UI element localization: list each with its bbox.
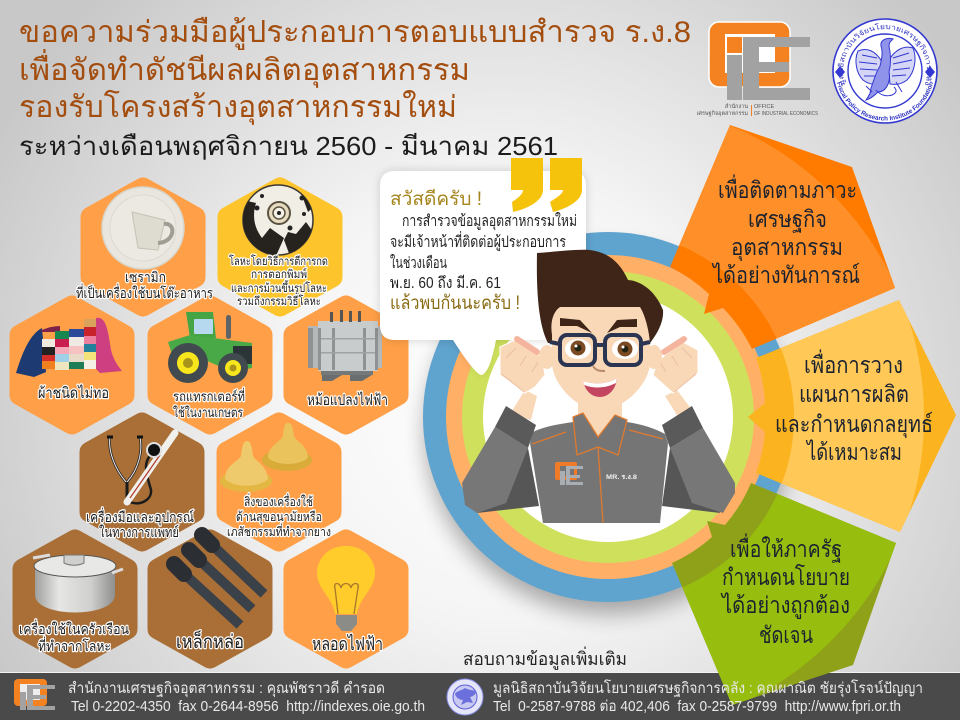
hexagon: nonwoven fabric [16,306,124,424]
shirt [462,406,735,523]
footer: OIE contact: สำนักงานเศรษฐกิจอุตสาหกรรม : คุณพัชราวดี คำรอด [68,680,385,698]
hexagon: light bulb [294,540,398,658]
arrow: yellow objective [748,300,956,532]
bubble text: ในช่วงเดือน [390,254,447,272]
arrow: green objective [672,483,896,705]
text: yellow objective [775,349,933,465]
label: tractor [173,388,245,420]
nose [593,366,605,371]
text: green objective: ชัดเจน [759,622,813,648]
hexagon: tractor [158,306,262,424]
hexagon grid of industries [16,185,398,658]
footer: OIE contact [14,679,425,715]
label: ceramics: ที่เป็นเครื่องใช้บนโต๊ะอาหาร [76,284,213,301]
title [19,16,691,126]
concentric rings [423,232,793,602]
text: orange objective: ได้อย่างทันการณ์ [711,262,860,288]
title: รองรับโครงสร้างอุตสาหกรรมใหม่ [19,89,457,126]
label: tractor: ใช้ในงานเกษตร [173,405,243,420]
label: metal forming: โลหะโดยวิธีการตีการกด [229,254,328,268]
ears [539,345,662,369]
label: medical instruments: เครื่องมือและอุปกรณ์ [86,508,194,526]
logo: OIE: OF INDUSTRIAL ECONOMICS [754,111,818,117]
label: nonwoven fabric: ผ้าชนิดไม่ทอ [38,384,109,402]
circle shadow [425,248,791,614]
footer: FPRI contact [447,679,923,715]
label: ceramics [76,269,213,301]
label: rubber health goods: เภสัชกรรมที่ทำจากยาง [227,523,331,539]
eyebrows [560,318,637,333]
bubble text: การสำรวจข้อมูลอุตสาหกรรมใหม่ [402,212,577,231]
text: green objective [720,533,850,648]
text: green objective: ได้อย่างถูกต้อง [720,592,850,619]
bubble text: จะมีเจ้าหน้าที่ติดต่อผู้ประกอบการ [390,231,566,252]
icon: quotation marks [511,158,582,212]
text: yellow objective: เพื่อการวาง [804,349,903,378]
label: rubber health goods [227,493,331,539]
subtitle: survey period: ระหว่างเดือนพฤศจิกายน 2560 - มีนาคม 2561 [19,131,558,161]
label: metal forming: การตอกพิมพ์ [251,267,307,281]
text: orange objective: เศรษฐกิจ [748,206,827,233]
hexagon: rubber health goods [220,423,331,541]
arms and hands [500,339,698,420]
logo: FPRI seal: Fiscal Policy Research Institute Foundation [837,82,933,120]
eyes [565,339,638,359]
text: orange objective: เพื่อติดตามภาวะ [718,174,857,203]
label: medical instruments: ในทางการแพทย์ [99,524,179,540]
label: kitchenware: เครื่องใช้ในครัวเรือน [19,620,129,637]
text: yellow objective: ได้เหมาะสม [805,439,902,465]
hexagon: ceramics [91,187,195,306]
hair back [537,250,663,343]
footer bar background [0,672,960,720]
label: light bulb: หลอดไฟฟ้า [312,633,383,654]
text: yellow objective: และกำหนดกลยุทธ์ [775,411,933,438]
footer: OIE contact: Tel 0-2202-4350 fax 0-2644-8956 http://indexes.oie.go.th [71,698,425,715]
label: kitchenware: ที่ทำจากโลหะ [38,637,111,654]
label: ceramics: เซรามิก [125,269,166,285]
footer: FPRI contact: Tel 0-2587-9788 ต่อ 402,406 fax 0-2587-9799 http://www.fpri.or.th [493,698,901,715]
logo: FPRI seal: มูลนิธิสถาบันวิจัยนโยบายเศรษฐกิจการคลัง [838,23,932,86]
face [551,307,650,411]
label: medical instruments [86,508,194,540]
logo: OIE: สำนักงาน [725,103,748,110]
label: tractor: รถแทรกเตอร์ที่ [173,388,245,404]
text: orange objective: อุตสาหกรรม [731,234,843,261]
bubble text [390,188,577,314]
arrow: orange objective [670,125,895,349]
shirt logo [555,462,583,485]
label: cast iron: เหล็กหล่อ [176,629,244,653]
hexagon: medical instruments [90,423,194,541]
footer: FPRI contact: มูลนิธิสถาบันวิจัยนโยบายเศรษฐกิจการคลัง : คุณผาณิต ชัยรุ่งโรจน์ปัญญา [493,679,923,698]
label: metal forming: และการม้วนขึ้นรูปโลหะ [231,280,327,295]
hexagon: kitchenware [23,540,127,658]
label: rubber health goods: สิ่งของเครื่องใช้ [244,493,313,509]
logo: FPRI seal [832,18,938,124]
speech bubble [380,158,586,375]
seal emblem: garuda [856,38,915,100]
glasses [550,335,650,365]
hexagon labels [19,254,388,654]
label: rubber health goods: ด้านสุขอนามัยหรือ [236,510,322,525]
mouth [583,378,617,397]
footer logo: FPRI seal [447,679,483,715]
title: ขอความร่วมมือผู้ประกอบการตอบแบบสำรวจ ร.ง.8 [19,16,691,50]
hexagon: metal forming [228,185,332,306]
label: transformer: หม้อแปลงไฟฟ้า [307,391,388,409]
title: เพื่อจัดทำดัชนีผลผลิตอุตสาหกรรม [19,49,470,89]
footer logo: OIE [14,679,55,710]
hexagon: cast iron [158,535,264,658]
hexagon: transformer [294,306,398,424]
text: green objective: กำหนดนโยบาย [722,564,850,590]
bubble text: สวัสดีครับ ! [390,188,482,210]
label: metal forming: รวมถึงกรรมวิธีโลหะ [237,294,321,308]
text: orange objective [711,174,860,288]
logo: OIE: เศรษฐกิจอุตสาหกรรม [697,110,748,117]
bubble text: พ.ย. 60 ถึง มี.ค. 61 [390,275,501,292]
character: Mr. R.NG.8 [462,250,735,523]
text: green objective: เพื่อให้ภาครัฐ [730,533,842,563]
label: metal forming [229,254,328,308]
bubble text: แล้วพบกันนะครับ ! [390,293,520,314]
logo: OIE: OFFICE [754,104,774,110]
shirt name tag: MR. ร.ง.8 [606,474,637,481]
contact heading: สอบถามข้อมูลเพิ่มเติม [463,646,627,670]
text: yellow objective: แผนการผลิต [799,381,909,407]
neck [578,395,622,440]
label: kitchenware [19,620,129,654]
logo: OIE [697,22,818,117]
